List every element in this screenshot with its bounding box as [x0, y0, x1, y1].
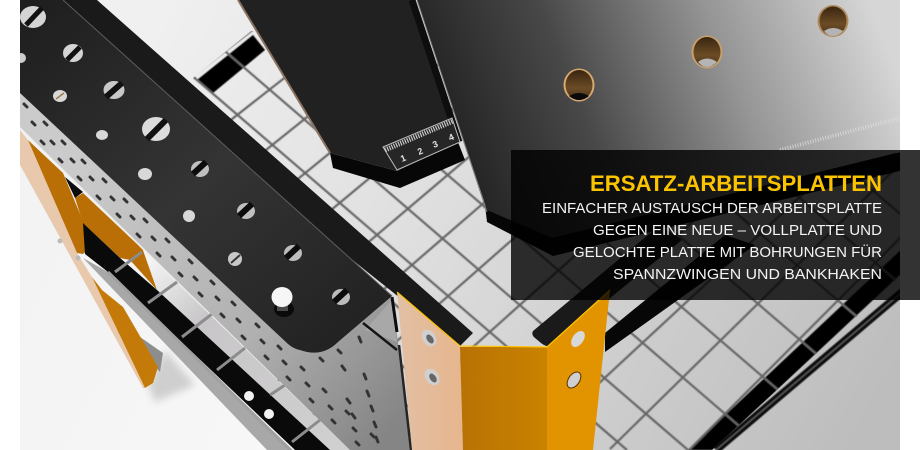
plate holes [16, 6, 350, 305]
ruler: 3 [431, 139, 439, 150]
ruler [383, 118, 460, 170]
black beam under plate [605, 235, 755, 352]
post screws [422, 330, 585, 388]
text panel [511, 150, 920, 300]
description text: GEGEN EINE NEUE – VOLLPLATTE UND [593, 222, 882, 239]
description text: SPANNZWINGEN UND BANKHAKEN [613, 266, 882, 283]
plate ruler [780, 118, 900, 150]
ruler: 1 [399, 153, 407, 164]
yellow corner post [397, 290, 610, 450]
black side rail [60, 0, 473, 346]
description text [542, 200, 882, 283]
black tab behind post [532, 225, 682, 346]
left orange leg [20, 130, 163, 388]
description text: EINFACHER AUSTAUSCH DER ARBEITSPLATTE [542, 200, 882, 217]
bench pin [272, 287, 294, 317]
ruler: 2 [416, 146, 424, 157]
black perforated top plate [16, 0, 392, 353]
ruler: 4 [447, 132, 455, 143]
lower shelf [83, 223, 350, 450]
wire mesh shelf [190, 21, 920, 450]
large work plate [417, 0, 920, 256]
perforated steel side [20, 93, 412, 450]
description text: GELOCHTE PLATTE MIT BOHRUNGEN FÜR [573, 243, 882, 261]
heading: ERSATZ-ARBEITSPLATTEN [590, 171, 882, 196]
mesh outer rail [714, 288, 900, 450]
shadow of left leg [148, 350, 195, 402]
small black plate with ruler [238, 0, 465, 188]
wood holes [564, 5, 848, 102]
